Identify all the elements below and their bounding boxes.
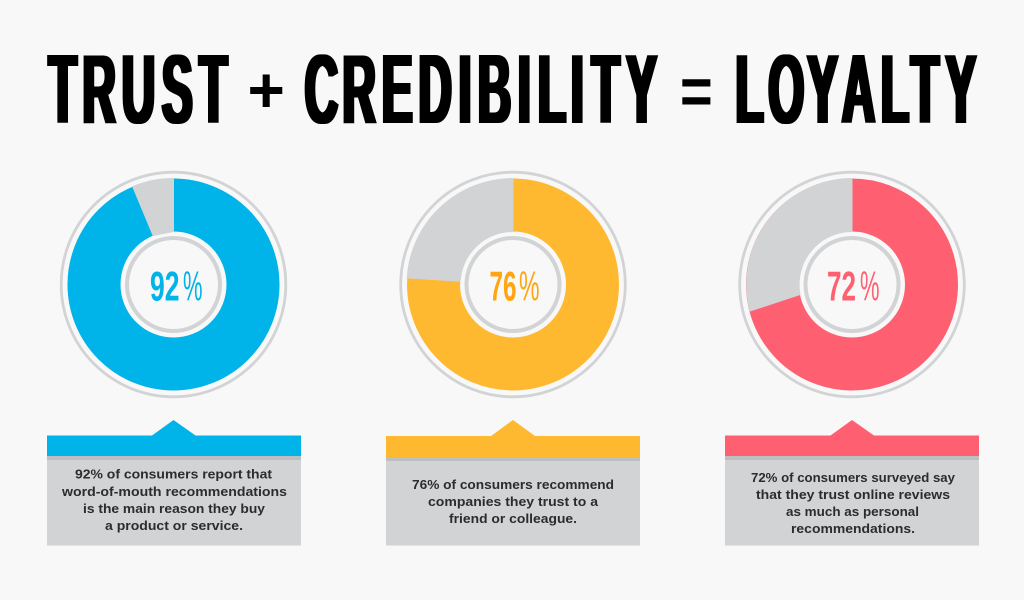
callout: 92%: a product or service. (105, 518, 243, 533)
title: LOYALTY (736, 36, 976, 145)
donut chart: 92%: 92 (150, 262, 180, 310)
callout: 92%: is the main reason they buy (83, 501, 266, 516)
donut chart: 72%: % (860, 262, 880, 310)
donut chart: 92%: % (183, 262, 202, 310)
title: CREDIBILITY (305, 36, 657, 145)
callout: 76%: 76% of consumers recommend (412, 477, 614, 492)
title (49, 36, 976, 145)
callout: 92%: word-of-mouth recommendations (61, 484, 287, 499)
title: TRUST (49, 36, 227, 145)
donut chart: 72% (740, 172, 964, 397)
callout: 72%: as much as personal (786, 504, 919, 519)
title: = (680, 54, 713, 129)
title: + (248, 54, 285, 126)
callout: 92%: 92% of consumers report that (75, 466, 273, 482)
donut chart: 76%: % (519, 262, 540, 310)
donut chart: 76% (401, 172, 625, 397)
callout: 72% (725, 420, 979, 546)
callout: 76%: companies they trust to a (428, 494, 599, 509)
callout: 72%: that they trust online reviews (756, 487, 950, 502)
callout: 72%: 72% of consumers surveyed say (751, 470, 956, 485)
donut chart: 76%: 76 (490, 262, 516, 310)
donut chart: 72%: 72 (827, 262, 856, 310)
donut chart: 92% (61, 172, 286, 397)
callout: 76% (386, 420, 640, 546)
callout: 76%: friend or colleague. (449, 511, 577, 526)
callout: 72%: recommendations. (791, 521, 915, 536)
callout: 92% (47, 420, 301, 546)
